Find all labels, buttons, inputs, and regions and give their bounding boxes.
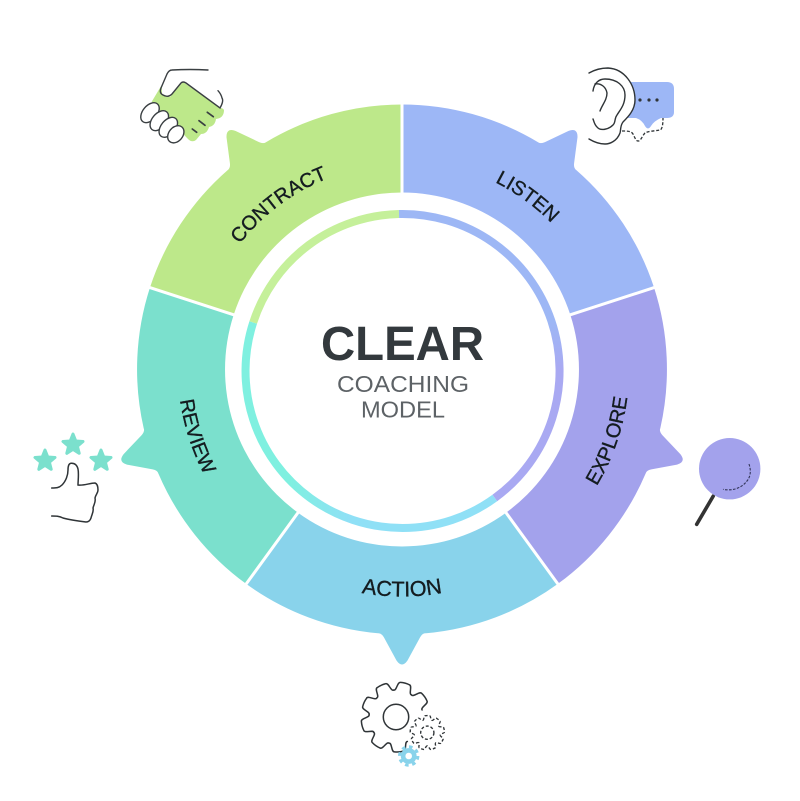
subtitle line: model: MODEL [361, 396, 445, 422]
center title: CLEAR [321, 318, 484, 371]
icon: magnifying glass [697, 438, 760, 524]
segment: contract [150, 104, 400, 314]
label: explore: EXPLORE [585, 396, 628, 485]
segment: explore [507, 289, 683, 583]
inner progress ring [246, 214, 560, 528]
icon: thumbs up with stars [35, 434, 111, 522]
icon: gears [360, 681, 445, 765]
icon: ear with speech bubble [589, 68, 674, 144]
icon: handshake [137, 70, 224, 146]
label: action: ACTION [361, 578, 441, 597]
label: listen: LISTEN [496, 170, 560, 222]
label: review: REVIEW [180, 399, 217, 472]
label: contract: CONTRACT [232, 166, 323, 242]
segment: action [248, 514, 556, 664]
subtitle line: coaching: COACHING [337, 371, 469, 397]
segment: review [121, 289, 297, 583]
segment: listen [404, 104, 654, 314]
center title [321, 318, 484, 422]
